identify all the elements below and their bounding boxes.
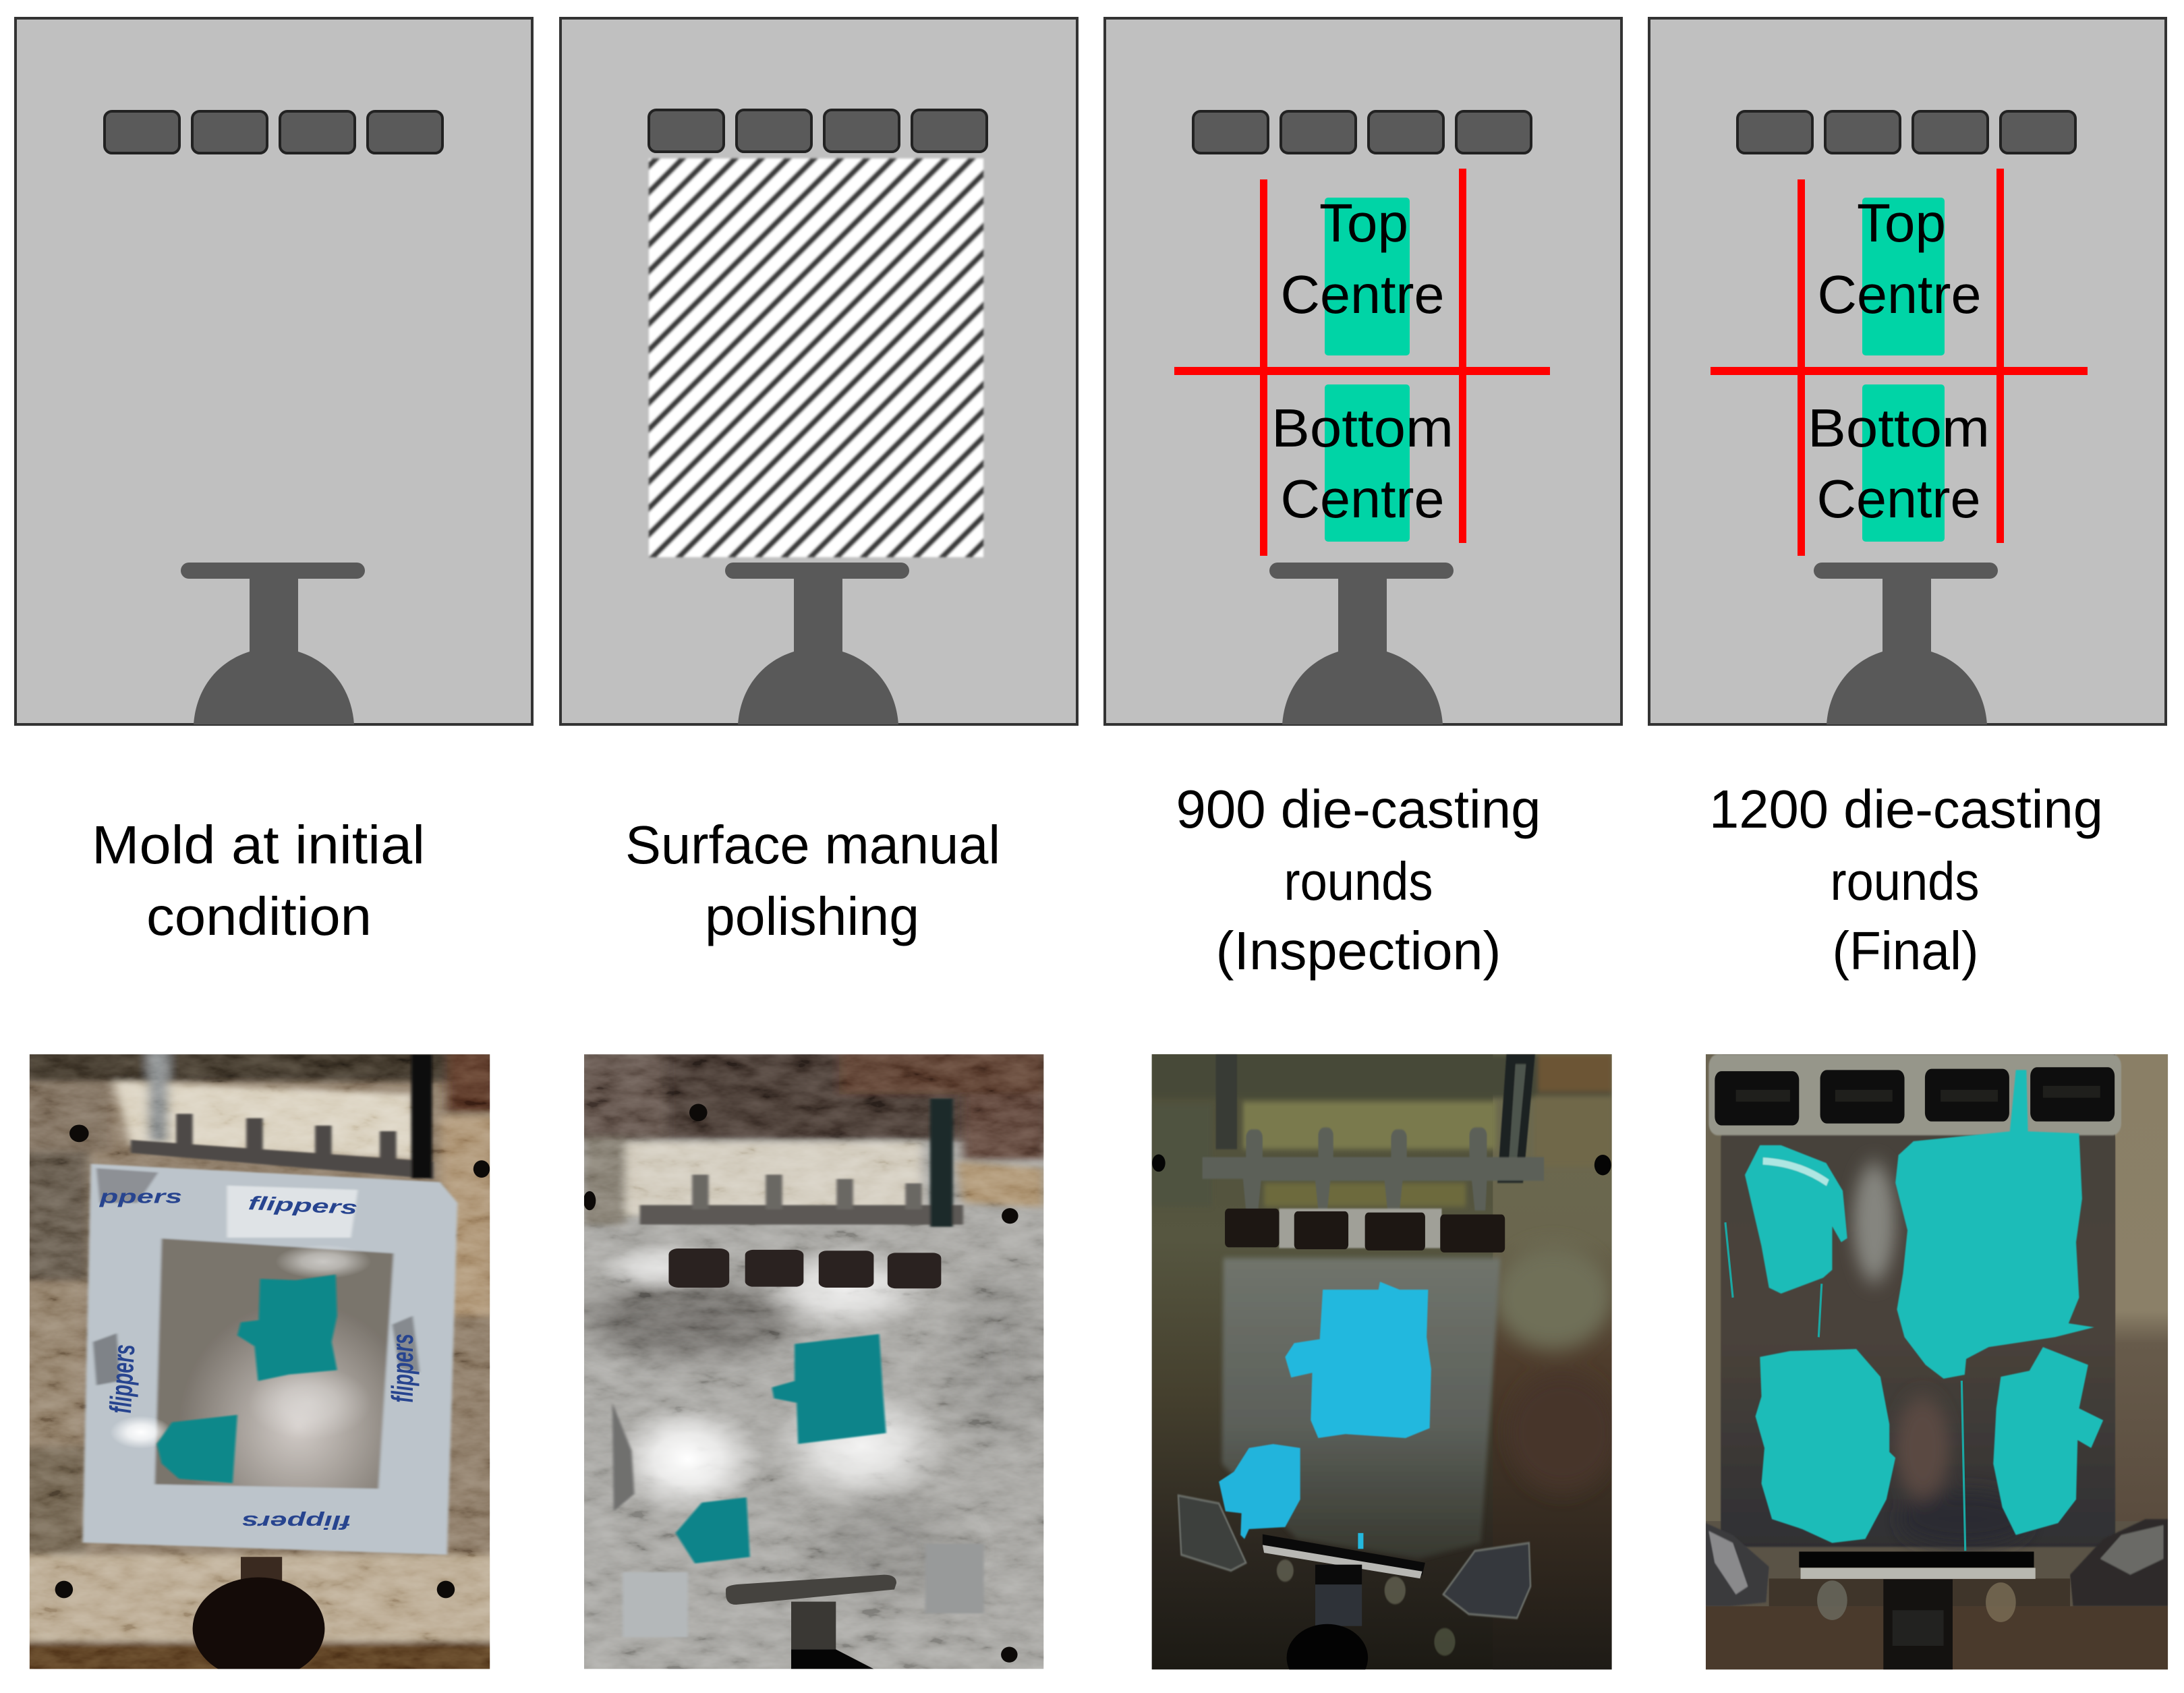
caption: mold at initial condition [92, 815, 425, 946]
caption: mold at initial condition: condition [146, 886, 372, 946]
runner bar and sprue [1799, 1551, 2036, 1669]
caption: surface manual polishing: Surface manual [625, 815, 1000, 875]
tape brand text: flippers [103, 1344, 141, 1414]
teal patch large [1895, 1070, 2094, 1379]
zone labels: Bottom [1808, 398, 1990, 458]
tape brand text: ppers [99, 1186, 182, 1207]
runner bar and sprue [726, 1575, 896, 1669]
caption: 900 die-casting rounds inspection [1176, 779, 1541, 981]
zone labels [1808, 193, 1990, 529]
sprue hole [193, 1557, 324, 1680]
drips [1725, 1222, 1965, 1551]
teal patch bottom [676, 1497, 750, 1563]
bottom centre zone [1862, 384, 1945, 542]
caption: surface manual polishing: polishing [705, 886, 919, 946]
red section lines [1711, 169, 2088, 556]
bars [1216, 1054, 1535, 1183]
icon: runner and sprue [1269, 563, 1454, 724]
caption: 1200 die-casting rounds final: (Final) [1832, 921, 1979, 981]
tape brand text: flippers [248, 1192, 359, 1218]
pads [1178, 1495, 1530, 1618]
blue patch top [1285, 1282, 1431, 1438]
caption: surface manual polishing [625, 815, 1000, 946]
gate slots [1225, 1209, 1505, 1253]
zone labels: Centre [1817, 469, 1980, 529]
runner [131, 1054, 434, 1179]
icon: four gate slots [649, 110, 987, 152]
icon: runner and sprue [1814, 563, 1998, 724]
zone labels: Top [1319, 193, 1408, 253]
lower plate [1706, 1578, 2168, 1669]
zone labels: Centre [1280, 264, 1445, 324]
blue patch bottom [1219, 1444, 1300, 1539]
panel: 1200 rounds final diagram [1649, 18, 2166, 724]
teal patch top [237, 1275, 337, 1381]
zone labels: Centre [1817, 264, 1982, 324]
mold plate [1721, 1127, 2115, 1547]
panel: mold at initial condition diagram [16, 18, 532, 724]
caption: 1200 die-casting rounds final: 1200 die-casting [1709, 779, 2103, 839]
hatched polished area [649, 159, 983, 557]
tape frame [82, 1164, 457, 1555]
bottom centre zone [1325, 384, 1410, 542]
tape brand text: flippers [385, 1333, 420, 1403]
teal patch bottom left [1756, 1349, 1895, 1543]
teal patch bottom right [1993, 1347, 2103, 1535]
red section lines [1174, 169, 1550, 556]
mold plate [1222, 1258, 1501, 1559]
zone labels [1271, 193, 1454, 529]
zone labels: Top [1857, 193, 1946, 253]
screw spots [1277, 1559, 1456, 1656]
tape brand text [99, 1186, 420, 1533]
gate slots [668, 1249, 941, 1288]
tape brand text: flippers [241, 1512, 351, 1533]
runner bar and sprue [1263, 1534, 1425, 1692]
runner [640, 1099, 963, 1227]
icon: four gate slots [105, 111, 442, 153]
photo: mold after 900 rounds [1152, 1054, 1616, 1692]
panel: surface manual polishing diagram [561, 18, 1077, 724]
caption: 1200 die-casting rounds final [1709, 779, 2103, 981]
icon: four gate slots [1737, 111, 2075, 153]
teal patch top left [1745, 1145, 1847, 1294]
photo: mold with tape at initial condition [21, 1047, 502, 1680]
caption: 1200 die-casting rounds final: rounds [1831, 851, 1979, 911]
panel: 900 rounds inspection diagram [1105, 18, 1621, 724]
gate slots [1715, 1067, 2115, 1126]
pads [1706, 1519, 2168, 1606]
caption: 900 die-casting rounds inspection: rounds [1284, 851, 1433, 911]
top centre zone [1862, 198, 1945, 355]
zone labels: Bottom [1271, 398, 1454, 458]
caption: mold at initial condition: Mold at initial [92, 815, 425, 875]
icon: runner and sprue [181, 563, 365, 724]
icon: four gate slots [1193, 111, 1531, 153]
teal patch top [772, 1334, 886, 1444]
zone labels: Centre [1280, 469, 1445, 529]
caption: 900 die-casting rounds inspection: (Inspection) [1215, 921, 1501, 981]
teal patch bottom [157, 1415, 237, 1483]
photo: polished mold [578, 1051, 1053, 1669]
runner [1203, 1127, 1544, 1211]
top centre zone [1325, 198, 1410, 355]
photo: mold after 1200 rounds [1706, 1054, 2168, 1669]
icon: runner and sprue [725, 563, 909, 724]
caption: 900 die-casting rounds inspection: 900 die-casting [1176, 779, 1541, 839]
